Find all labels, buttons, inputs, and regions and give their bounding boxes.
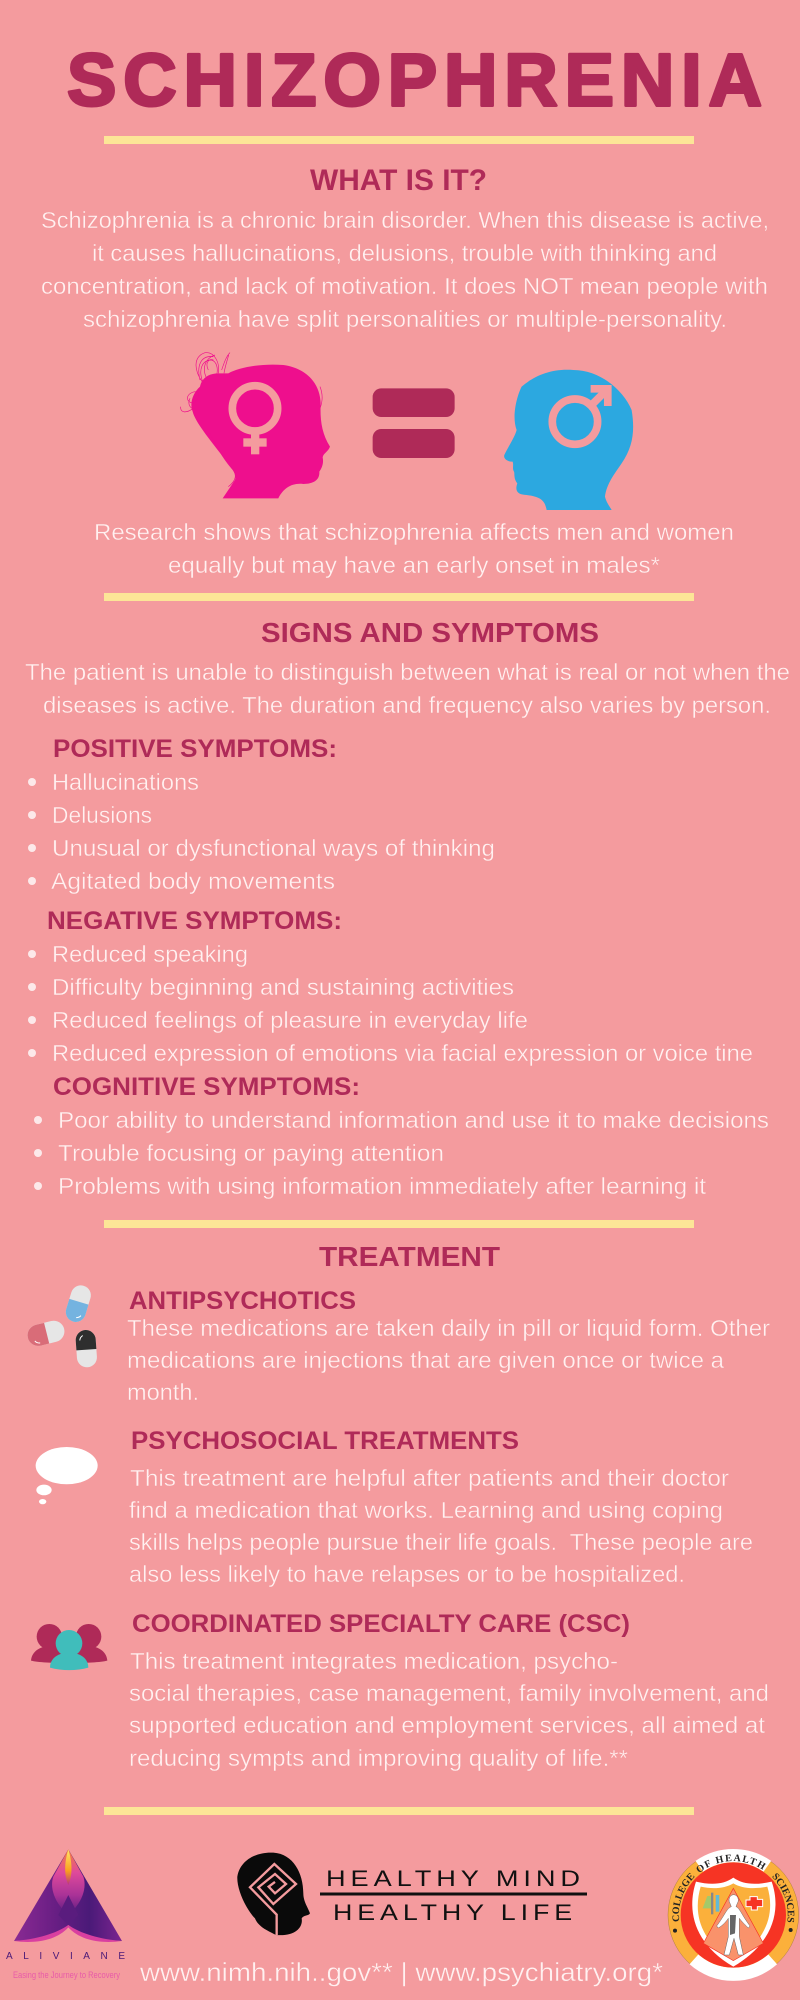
logo: Aliviane [6, 1849, 125, 1980]
logo: Healthy Mind Healthy Life: HEALTHY MIND [326, 1866, 585, 1891]
logo: College of Health Sciences seal: SCIENCES [772, 1873, 794, 1922]
logo: Healthy Mind Healthy Life [237, 1853, 587, 1935]
text block: definition: Schizophrenia is a chronic brain disorder. When this disease is active, [41, 207, 769, 233]
text block: antipsychotics [127, 1315, 770, 1405]
panel: signs and symptoms [25, 617, 790, 1199]
heading: cognitive symptoms: COGNITIVE SYMPTOMS: [53, 1073, 360, 1101]
heading: treatment: TREATMENT [319, 1241, 500, 1272]
panel: footer [6, 1849, 799, 1987]
title: SCHIZOPHRENIA [67, 38, 762, 122]
logo: Aliviane: ALIVIANE [6, 1951, 125, 1962]
icon: female symbol [232, 386, 278, 454]
icon: group of people [31, 1624, 107, 1670]
text block: definition: it causes hallucinations, delusions, trouble with thinking and [92, 240, 717, 266]
heading: coordinated specialty care: COORDINATED SPECIALTY CARE (CSC) [132, 1610, 630, 1638]
panel: what is it [41, 164, 769, 578]
heading: signs and symptoms: SIGNS AND SYMPTOMS [261, 617, 599, 648]
heading: antipsychotics: ANTIPSYCHOTICS [129, 1287, 356, 1315]
list: negative symptoms: Reduced expression of emotions via facial expression or voice tine [52, 1040, 753, 1066]
text block: coordinated specialty care [129, 1648, 769, 1771]
icon: male symbol [552, 385, 612, 444]
list: negative symptoms: Difficulty beginning and sustaining activities [52, 974, 514, 1000]
list: positive symptoms: Hallucinations [52, 769, 199, 795]
icon: equals sign [373, 388, 455, 458]
list: cognitive symptoms: Trouble focusing or paying attention [58, 1140, 444, 1166]
text block: coordinated specialty care: supported education and employment services, all aimed at [129, 1712, 766, 1738]
text block: coordinated specialty care: reducing sympts and improving quality of life.** [129, 1745, 628, 1771]
list: negative symptoms: Reduced feelings of pleasure in everyday life [52, 1007, 528, 1033]
text block: antipsychotics: These medications are taken daily in pill or liquid form. Other [127, 1315, 770, 1341]
icon: thought bubble [36, 1447, 98, 1504]
text block: definition: schizophrenia have split personalities or multiple-personality. [83, 306, 727, 332]
text block: psychosocial treatments: This treatment are helpful after patients and their doctor [130, 1465, 729, 1491]
text block: antipsychotics: medications are injections that are given once or twice a [127, 1347, 724, 1373]
list: cognitive symptoms: Problems with using information immediately after learning it [58, 1173, 707, 1199]
list: cognitive symptoms: Poor ability to understand information and use it to make decisions [58, 1107, 769, 1133]
logo: College of Health Sciences seal [668, 1849, 799, 1981]
text block: research caption [94, 519, 734, 578]
heading: psychosocial treatments: PSYCHOSOCIAL TREATMENTS [131, 1427, 519, 1455]
text block: coordinated specialty care: This treatment integrates medication, psycho- [130, 1648, 618, 1674]
icon: female head silhouette [181, 353, 330, 498]
panel: treatment [25, 1241, 770, 1771]
text block: signs intro: The patient is unable to distinguish between what is real or not when the [25, 659, 790, 685]
list: positive symptoms: Unusual or dysfunctional ways of thinking [52, 835, 495, 861]
text block: psychosocial treatments: skills helps people pursue their life goals. These people are [129, 1529, 753, 1555]
text block: antipsychotics: month. [127, 1379, 199, 1405]
text block: psychosocial treatments: find a medication that works. Learning and using coping [129, 1497, 723, 1523]
text block: psychosocial treatments: also less likely to have relapses or to be hospitalized. [129, 1561, 685, 1587]
list: positive symptoms: Agitated body movements [51, 868, 335, 894]
list: cognitive symptoms [34, 1107, 769, 1199]
list: negative symptoms [28, 941, 753, 1066]
logo: College of Health Sciences seal: OF HEALTH [696, 1854, 766, 1872]
text block: signs intro: diseases is active. The duration and frequency also varies by person. [43, 692, 771, 718]
text block: research caption: equally but may have an early onset in males* [168, 552, 660, 578]
heading: what is it: WHAT IS IT? [310, 164, 487, 197]
icon: pills [25, 1283, 98, 1368]
heading: negative symptoms: NEGATIVE SYMPTOMS: [47, 907, 342, 935]
icon: male head silhouette [504, 370, 633, 510]
text block: research caption: Research shows that schizophrenia affects men and women [94, 519, 734, 545]
text block: psychosocial treatments [129, 1465, 753, 1587]
logo: College of Health Sciences seal: COLLEGE [672, 1872, 695, 1922]
logo: Healthy Mind Healthy Life: HEALTHY LIFE [333, 1900, 577, 1925]
list: positive symptoms [28, 769, 495, 894]
heading: positive symptoms: POSITIVE SYMPTOMS: [53, 735, 337, 763]
text block: signs intro [25, 659, 790, 718]
list: positive symptoms: Delusions [52, 802, 152, 828]
logo: Aliviane: Easing the Journey to Recovery [13, 1970, 120, 1980]
list: negative symptoms: Reduced speaking [52, 941, 248, 967]
text block: source urls: www.nimh.nih..gov** | www.psychiatry.org* [139, 1957, 663, 1987]
text block: definition [41, 207, 769, 332]
text block: coordinated specialty care: social therapies, case management, family involvement, and [129, 1680, 769, 1706]
text block: definition: concentration, and lack of motivation. It does NOT mean people with [41, 273, 768, 299]
